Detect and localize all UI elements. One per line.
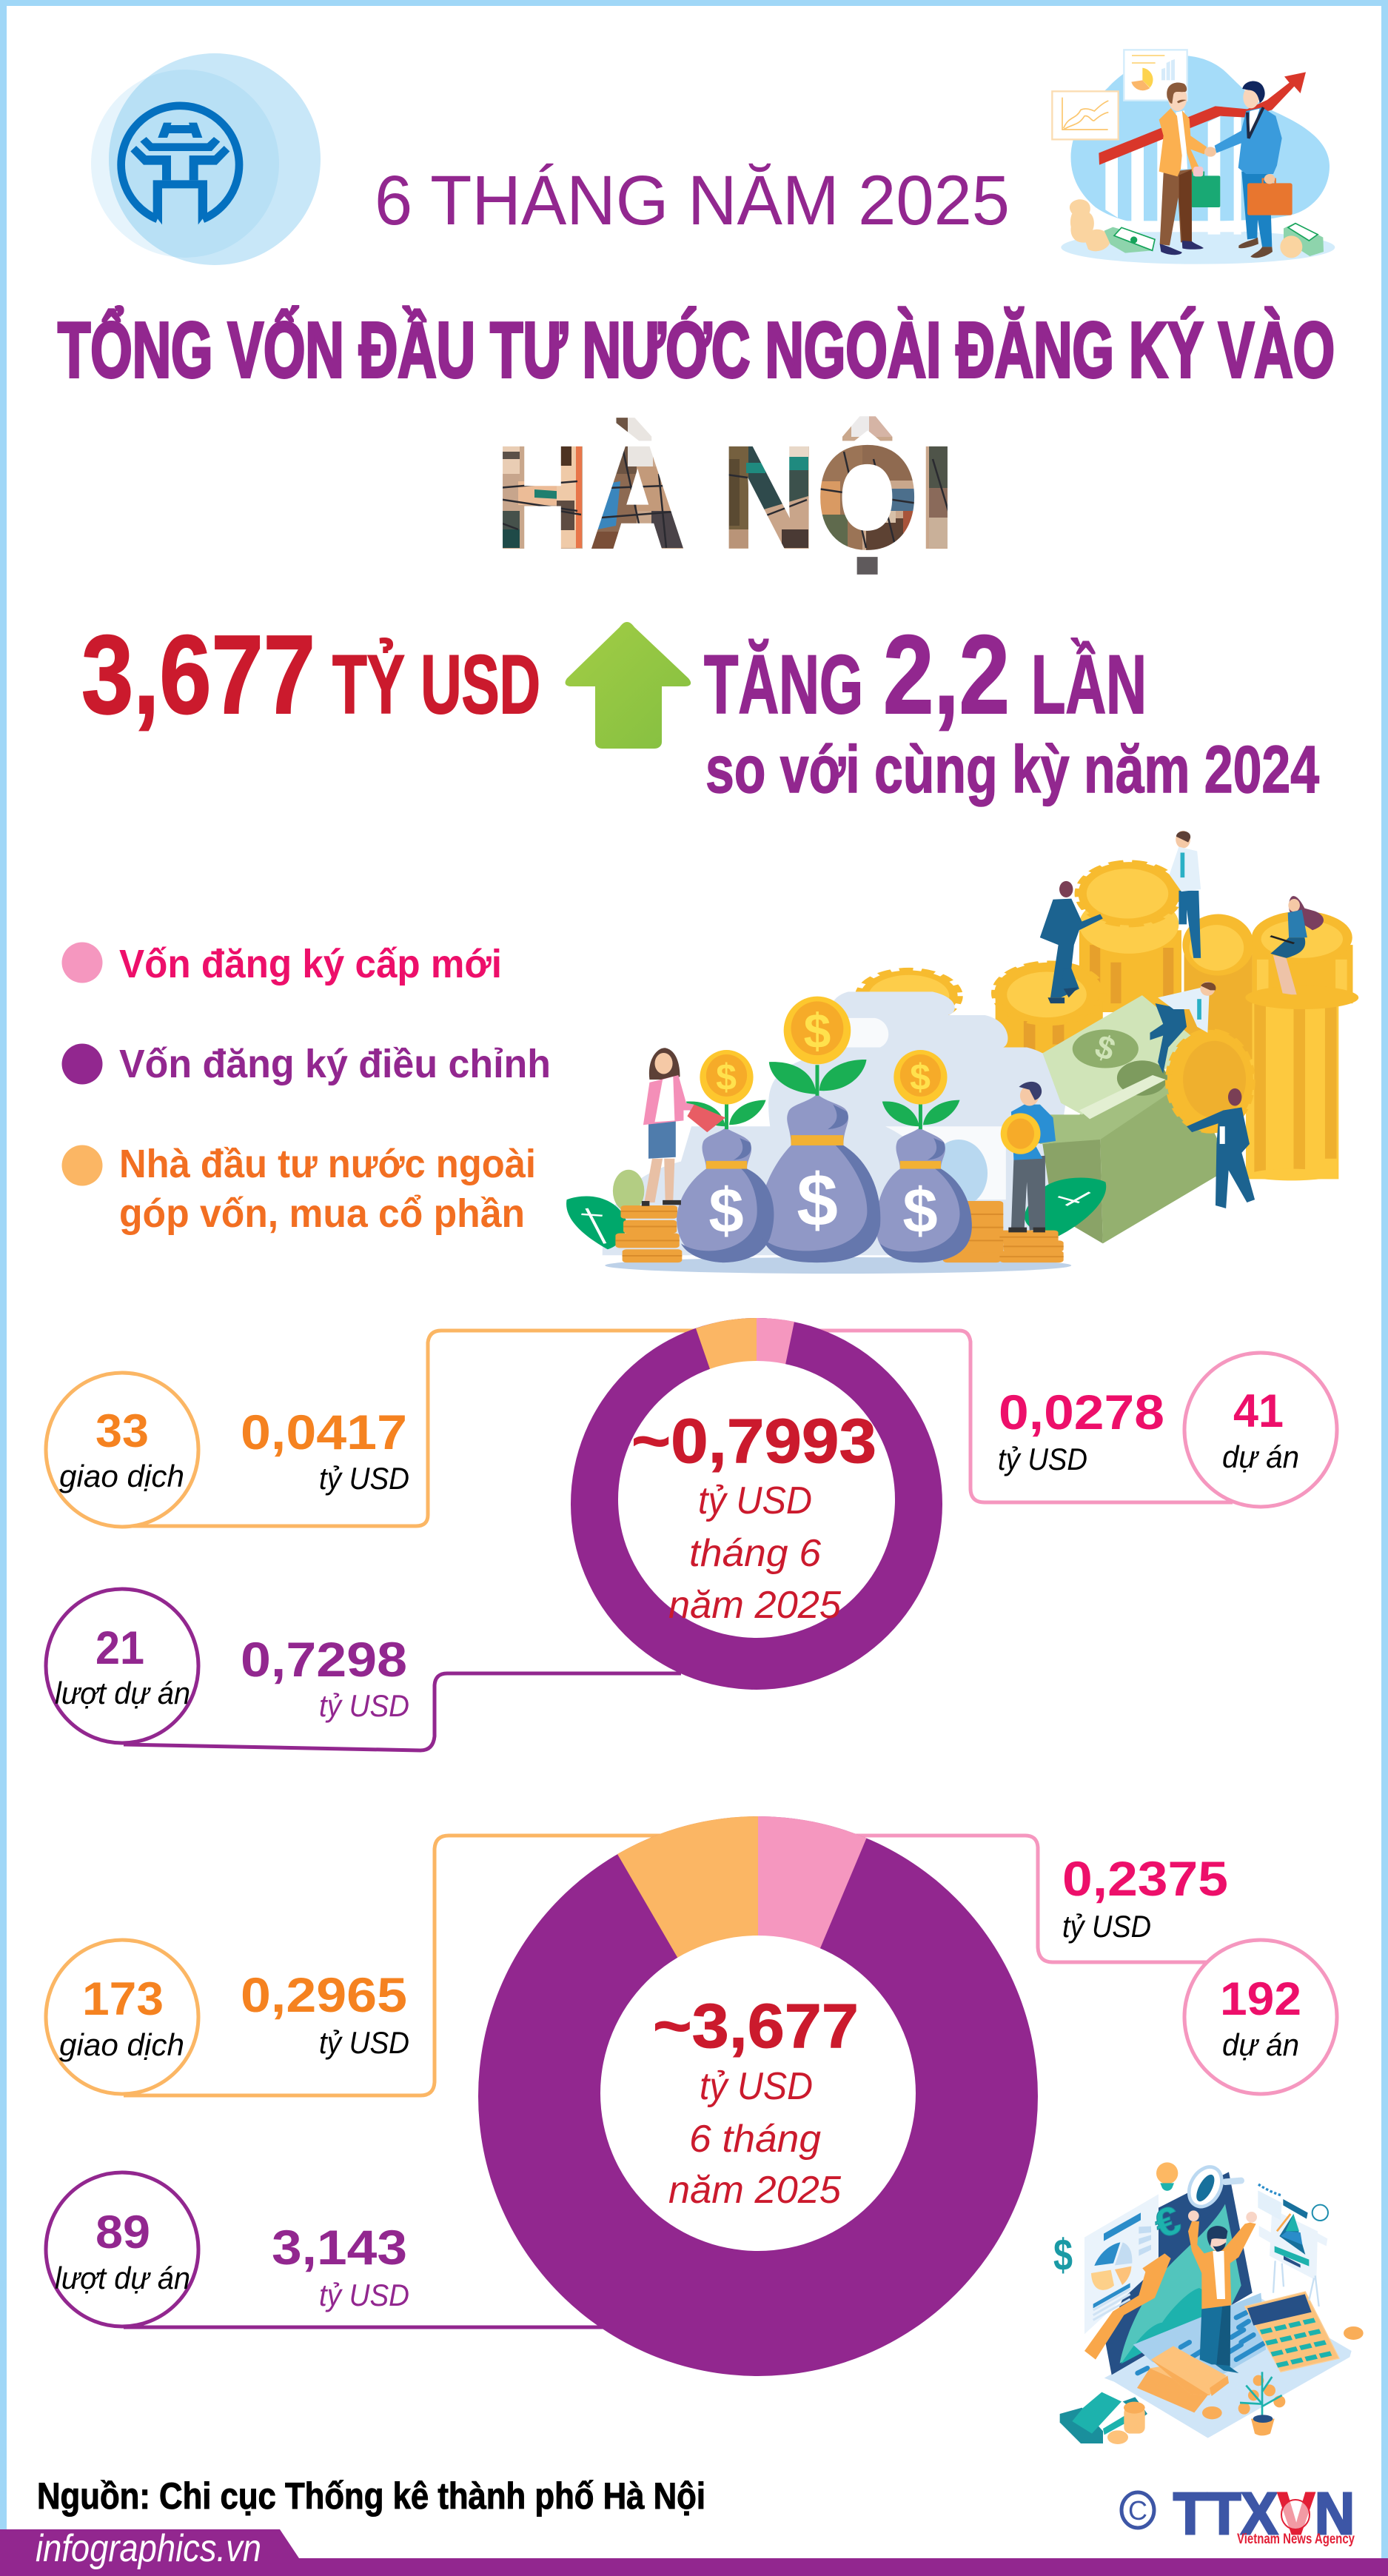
connector: pink xyxy=(792,1331,1233,1502)
callout: 173 transactions xyxy=(46,1940,198,2094)
donut: six months 2025 xyxy=(478,1816,1038,2376)
banknote pile xyxy=(1040,995,1231,1243)
value: 0,0417: tỷ USD xyxy=(319,1461,409,1496)
donut centre text: tỷ USD xyxy=(698,1479,812,1522)
value: 3,143: tỷ USD xyxy=(319,2278,409,2312)
value: 0,2375 xyxy=(1062,1851,1228,1944)
callout: 33 transactions xyxy=(46,1373,198,1527)
copyright mark: C xyxy=(1128,2495,1147,2526)
donut centre text: 6 tháng xyxy=(689,2118,821,2161)
woman watering plant xyxy=(642,1048,725,1206)
connector: orange xyxy=(124,1836,666,2095)
value: 0,0417 xyxy=(241,1405,409,1496)
value: 0,7298: tỷ USD xyxy=(319,1688,409,1723)
legend item: foreign investors capital contribution: góp vốn, mua cổ phần xyxy=(119,1191,525,1236)
business people on coins xyxy=(1040,831,1324,1208)
leaves xyxy=(566,1170,1106,1249)
background cloud shape xyxy=(603,991,1067,1255)
donut centre text: tháng 6 xyxy=(689,1532,821,1575)
legend xyxy=(62,942,551,1236)
illustration: money bags and coin stacks: $ xyxy=(804,1003,831,1058)
callout: 192 projects: 192 xyxy=(1220,1973,1301,2025)
connector: purple xyxy=(124,1673,681,1750)
callout: 33 transactions: 33 xyxy=(95,1405,149,1457)
legend item: foreign investors capital contribution xyxy=(62,1142,536,1236)
money bags xyxy=(677,1094,972,1262)
value: 0,2375: 0,2375 xyxy=(1062,1851,1228,1906)
man holding coin xyxy=(1001,1082,1056,1232)
plants with coins xyxy=(686,997,960,1129)
legend item: new registered capital: Vốn đăng ký cấp mới xyxy=(119,942,502,986)
website: infographics.vn xyxy=(36,2527,261,2570)
donut centre text xyxy=(631,1406,876,1627)
key figure: 3,677 tỷ USD xyxy=(81,612,540,737)
callout: 173 transactions: giao dịch xyxy=(59,2027,184,2062)
illustration: money bags and coin stacks: $ xyxy=(708,1176,744,1246)
key figure: 3,677 tỷ USD: 3,677 xyxy=(81,612,315,737)
key figure: tăng 2,2 lần: LẦN xyxy=(1031,638,1147,731)
value: 0,0278: 0,0278 xyxy=(999,1385,1164,1439)
illustration: money bags and coin stacks: $ xyxy=(902,1176,938,1246)
callout: 33 transactions: giao dịch xyxy=(59,1459,184,1493)
value: 0,7298 xyxy=(241,1632,409,1723)
value: 0,7298: 0,7298 xyxy=(241,1632,407,1687)
value: 0,0278 xyxy=(998,1385,1164,1476)
value: 0,0417: 0,0417 xyxy=(241,1405,407,1459)
icon: Hanoi city logo xyxy=(91,53,321,265)
small coin stacks xyxy=(615,1201,1064,1262)
chart: June 2025 donut section xyxy=(46,1318,1337,1750)
value: 0,2965: tỷ USD xyxy=(319,2025,409,2060)
callout: 41 projects: 41 xyxy=(1233,1385,1284,1437)
callout: 41 projects: dự án xyxy=(1222,1439,1299,1474)
agency wordmark: TTXVN xyxy=(1173,2480,1355,2546)
illustration: business handshake xyxy=(1052,50,1335,264)
source: Nguồn: Chi cục Thống kê thành phố Hà Nội xyxy=(37,2475,705,2517)
key figure: tăng 2,2 lần: 2,2 xyxy=(883,612,1010,737)
value: 3,143: 3,143 xyxy=(272,2220,407,2275)
copyright mark xyxy=(1122,2492,1154,2528)
value: 0,2375: tỷ USD xyxy=(1062,1909,1151,1944)
icon: euro symbol: € xyxy=(1148,2198,1187,2247)
key figure: 3,677 tỷ USD: TỶ USD xyxy=(332,638,540,731)
callout: 89 project turns xyxy=(46,2172,198,2326)
donut centre text: năm 2025 xyxy=(668,2169,842,2212)
icon: dollar symbol: $ xyxy=(1053,2230,1073,2280)
callout: 89 project turns: 89 xyxy=(95,2207,150,2258)
donut centre text: ~0,7993 xyxy=(631,1406,876,1476)
agency tagline: Vietnam News Agency xyxy=(1237,2532,1355,2547)
connector: orange xyxy=(124,1331,700,1526)
connector: pink xyxy=(851,1836,1214,1962)
illustration: money bags and coin stacks: $ xyxy=(1090,1028,1120,1068)
value: 3,143 xyxy=(272,2220,409,2312)
value: 0,0278: tỷ USD xyxy=(998,1442,1087,1476)
value: 0,2965 xyxy=(241,1967,409,2060)
donut centre text: tỷ USD xyxy=(700,2065,813,2108)
donut centre text: năm 2025 xyxy=(668,1584,842,1627)
globe mark xyxy=(1281,2500,1310,2529)
callout: 41 projects xyxy=(1184,1353,1337,1507)
legend item: adjusted registered capital: Vốn đăng ký điều chỉnh xyxy=(119,1042,551,1086)
ground shadow xyxy=(605,1257,1071,1274)
callout: 89 project turns: lượt dự án xyxy=(55,2261,190,2295)
illustration: money bags and coin stacks: $ xyxy=(910,1057,931,1098)
legend item: foreign investors capital contribution: Nhà đầu tư nước ngoài xyxy=(119,1142,536,1186)
donut: June 2025 xyxy=(571,1318,942,1690)
donut centre text xyxy=(653,1991,859,2212)
illustration: money bags and coin stacks xyxy=(566,831,1358,1274)
callout: 21 project turns xyxy=(46,1589,198,1743)
callout: 192 projects xyxy=(1184,1940,1337,2094)
connector: purple xyxy=(124,2325,614,2329)
callout: 173 transactions: 173 xyxy=(82,1973,164,2025)
callout: 192 projects: dự án xyxy=(1222,2027,1299,2062)
value: 0,2965: 0,2965 xyxy=(241,1967,407,2022)
title: Hà Nội with photo texture: HÀ NỘI xyxy=(495,417,955,578)
key figure: tăng 2,2 lần: TĂNG xyxy=(704,638,863,731)
callout: 21 project turns: 21 xyxy=(95,1622,144,1674)
key figure: tăng 2,2 lần xyxy=(704,612,1147,737)
illustration: isometric laptop with investor xyxy=(1060,2161,1364,2444)
heading: period: 6 THÁNG NĂM 2025 xyxy=(375,161,1010,240)
illustration: money bags and coin stacks: $ xyxy=(716,1057,737,1098)
donut centre text: ~3,677 xyxy=(653,1991,859,2061)
callout: 21 project turns: lượt dự án xyxy=(55,1676,190,1710)
footer bar xyxy=(0,2527,1388,2576)
coin stacks xyxy=(859,862,1358,1180)
illustration: money bags and coin stacks: $ xyxy=(797,1159,838,1242)
chart: six months 2025 donut section xyxy=(46,1816,1337,2376)
large leaning coin xyxy=(1167,1030,1253,1132)
icon: green up arrow xyxy=(566,622,691,749)
logo: TTXVN xyxy=(1122,2480,1355,2547)
